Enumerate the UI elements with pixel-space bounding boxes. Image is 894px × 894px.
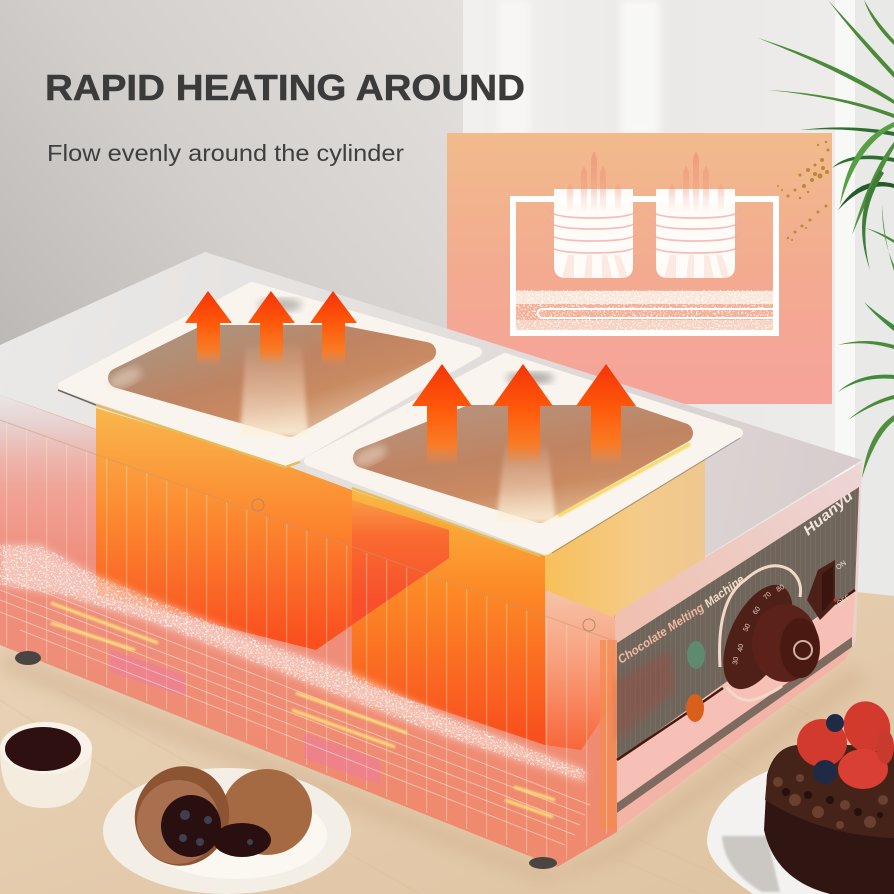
- filling: [161, 795, 221, 857]
- dial plate: 30: [732, 656, 740, 665]
- diagram tank outline: [513, 199, 776, 333]
- panel label 2: Machine: [702, 572, 747, 610]
- dial plate: 50: [742, 623, 752, 633]
- brand: Huanyu: [800, 487, 856, 538]
- screws: [252, 499, 264, 511]
- power switch: [807, 560, 852, 620]
- chocolate cup: [0, 722, 92, 808]
- basin top smudge: [258, 298, 302, 312]
- basin top smudge: [506, 372, 554, 384]
- heat column centre: [352, 490, 545, 745]
- diagram heat rings: [548, 208, 741, 253]
- basin well: [118, 335, 426, 427]
- arrows: left basin: [185, 291, 357, 366]
- panel thin stripe: [617, 637, 852, 813]
- panel red reflection: [617, 650, 675, 740]
- basin well: [363, 415, 683, 513]
- gold speckle: [777, 141, 830, 241]
- basin corner highlight: [350, 441, 390, 471]
- plant: [758, 0, 894, 478]
- lip line: [0, 420, 612, 640]
- cake crumble top: [765, 745, 894, 838]
- cake: [707, 695, 894, 894]
- left basin: [58, 287, 477, 467]
- diagram cylinder right: [656, 189, 735, 278]
- dial plate: 60: [752, 606, 762, 616]
- plate with buns: [103, 756, 351, 894]
- panel lower pink: [617, 647, 852, 830]
- machine body: [0, 252, 862, 869]
- basin yellow glow: [558, 444, 690, 516]
- title: RAPID HEATING AROUND: [45, 67, 525, 108]
- strawberries: [797, 719, 847, 767]
- machine front face: [0, 395, 617, 867]
- right basin: [309, 358, 740, 556]
- dial plate: 70: [762, 591, 773, 601]
- machine top plate: [0, 252, 862, 612]
- diagram rising arrows: [567, 151, 724, 212]
- diagram cylinder shading rays: [562, 255, 730, 278]
- heat overlap: [352, 500, 449, 625]
- basin rim: [309, 358, 738, 550]
- heat column left: [96, 408, 449, 650]
- right bun: [222, 769, 312, 855]
- panel: heating diagram: [447, 133, 832, 404]
- control panel: [615, 487, 859, 830]
- vertical grid: [0, 420, 612, 865]
- dark line: [617, 688, 723, 760]
- diagram cylinder left: [554, 189, 633, 278]
- diagram heating element: [516, 290, 773, 330]
- table top: [0, 590, 894, 894]
- dial knob: [752, 604, 820, 682]
- pink patches: [110, 650, 185, 697]
- basin corner highlight: [105, 363, 145, 393]
- left bun: [124, 756, 240, 876]
- panel label: Chocolate Melting: [615, 600, 707, 667]
- machine right face: [615, 462, 862, 832]
- orange corner strip: [600, 640, 617, 830]
- basin reflection: [240, 345, 308, 436]
- blueberries: [813, 760, 837, 784]
- dial scale arc: [720, 566, 801, 667]
- front lip shading: [0, 395, 96, 590]
- heat front corner: [545, 590, 615, 750]
- basin rim: [63, 287, 477, 462]
- dial plate: 80: [776, 584, 786, 594]
- dial plate: [709, 574, 807, 700]
- panel pink band: [617, 592, 855, 803]
- subtitle: Flow evenly around the cylinder: [47, 140, 404, 166]
- indicator orange: [686, 694, 704, 722]
- power switch: ON: [835, 560, 848, 572]
- feet: [15, 651, 41, 665]
- heat column right: [545, 433, 705, 625]
- basin reflection: [496, 445, 556, 522]
- cake plate: [707, 770, 894, 894]
- arrows: right basin: [412, 364, 636, 466]
- power switch: OFF: [836, 594, 852, 608]
- dial lower arc: [727, 686, 782, 700]
- foam and speed lines: [0, 545, 590, 845]
- indicator lights: [687, 641, 705, 669]
- dial plate: 40: [737, 643, 745, 652]
- panel dark band: [617, 487, 859, 760]
- cake body: [764, 745, 894, 894]
